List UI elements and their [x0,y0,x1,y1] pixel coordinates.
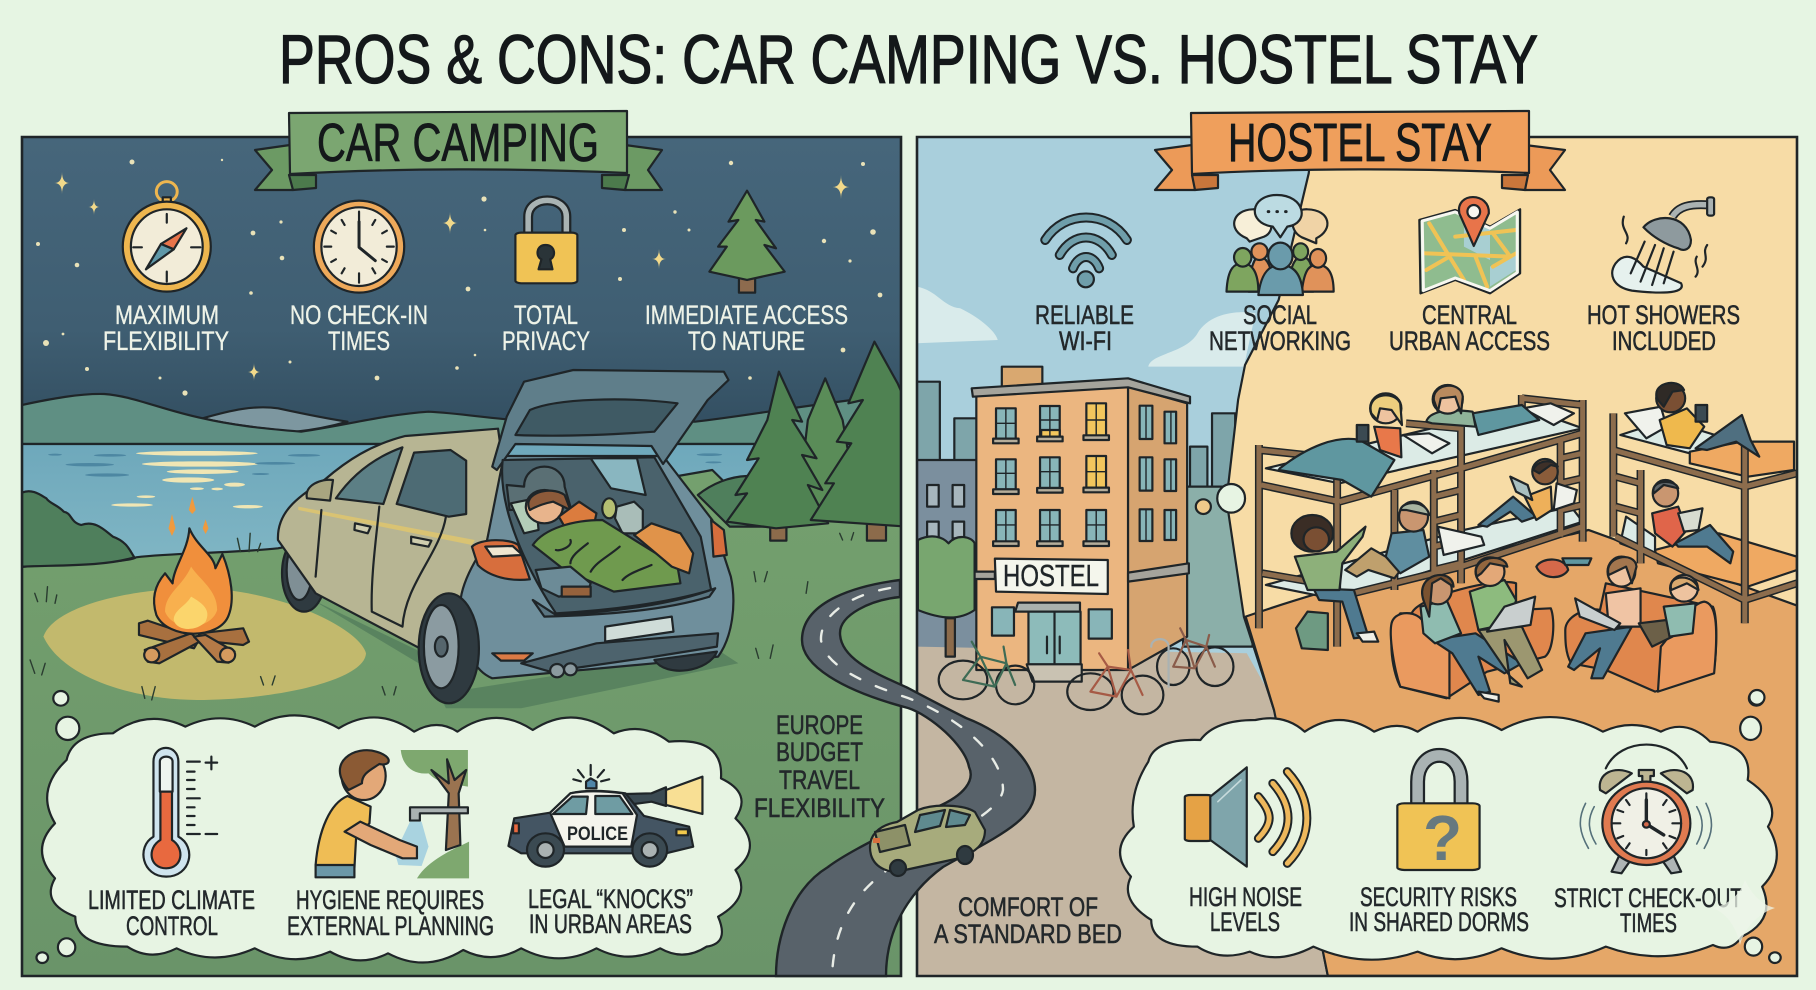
bicycles [939,628,1233,714]
pros labels: hostel stay [1035,300,1740,356]
cons cloud: hostel stay [1120,717,1777,960]
stars [36,159,882,396]
pros labels: hostel stay: SOCIAL [1243,300,1317,330]
panel: hostel stay [917,130,1816,980]
cons labels: car camping: CONTROL [126,911,218,941]
label: europe budget travel flexibility: TRAVEL [779,765,860,795]
hills, lake and ground [17,393,909,980]
icon: padlock with question mark [1397,755,1480,870]
sparkle watermark [1712,880,1775,945]
car with open hatch [278,370,733,703]
cons labels: car camping: LIMITED CLIMATE [88,885,255,915]
pros labels: hostel stay: HOT SHOWERS [1587,300,1740,330]
icon: speaker [1185,767,1307,867]
night sky scene [17,137,909,980]
cons labels: hostel stay: TIMES [1620,908,1677,938]
top bunk guest with blanket [1523,403,1574,425]
banner title: CAR CAMPING [317,113,599,173]
icon: police car with flashlight [508,765,702,867]
icon: clock [314,201,404,293]
banner title: HOSTEL STAY [1228,113,1492,173]
panel border [22,137,901,976]
banner: hostel stay [1155,111,1565,190]
winding road [776,580,1035,976]
label: europe budget travel flexibility [754,710,885,823]
cons labels: hostel stay: HIGH NOISE [1189,882,1302,912]
pros labels: car camping: FLEXIBILITY [103,326,229,356]
icon: hot shower [1612,197,1714,293]
top right guest [1625,407,1667,438]
sofas [1391,582,1553,698]
cons labels: hostel stay [1189,882,1742,938]
panel border [917,137,1797,976]
pros labels: hostel stay: INCLUDED [1612,326,1716,356]
banner: car camping [255,111,662,190]
pros labels: hostel stay: CENTRAL [1422,300,1517,330]
trees [727,342,908,541]
hostel sign text: HOSTEL [1003,558,1099,593]
pros labels: car camping: PRIVACY [502,326,590,356]
pros labels: car camping: TIMES [328,326,390,356]
icon: thermometer [143,748,217,877]
grass tufts [30,533,854,700]
cons labels: car camping: HYGIENE REQUIRES [296,885,484,915]
cons labels: hostel stay: LEVELS [1210,907,1280,937]
cons labels: car camping: IN URBAN AREAS [529,909,692,939]
backpack and floor items [1536,560,1568,577]
question mark: ? [1423,802,1462,874]
hostel scene [917,130,1816,980]
label: europe budget travel flexibility: EUROPE [776,710,863,740]
bunk beds and dorm guests [1259,383,1797,702]
thought bubble dots right [1196,484,1781,963]
pros labels: hostel stay: NETWORKING [1209,326,1351,356]
warm dorm interior [1227,130,1816,976]
cons labels: car camping: LEGAL “KNOCKS” [528,884,693,914]
pros labels: hostel stay: URBAN ACCESS [1389,326,1550,356]
pros labels: car camping: IMMEDIATE ACCESS [645,300,848,330]
sofa guests [1432,633,1522,695]
mattresses [1266,407,1797,600]
cons cloud: car camping [42,715,750,963]
glow around campfire [43,588,366,700]
campfire [139,497,249,663]
cons labels: hostel stay: IN SHARED DORMS [1349,907,1529,937]
cons labels: car camping [88,884,693,941]
hostel building [918,367,1190,682]
clouds [917,287,1255,367]
label: europe budget travel flexibility: BUDGET [776,737,863,767]
lower bunk reader [1554,483,1577,510]
thought bubble dots left [36,691,79,963]
icon: padlock [515,200,577,283]
icon: compass [123,182,211,292]
label: europe budget travel flexibility: FLEXIBILITY [754,793,885,823]
panel: car camping [17,137,909,980]
label: comfort of a standard bed [934,892,1122,949]
icon: social networking [1227,195,1334,295]
pros labels: hostel stay: WI-FI [1059,326,1112,356]
pros labels: car camping: TOTAL [514,300,578,330]
cons labels: hostel stay: SECURITY RISKS [1360,882,1517,912]
bunk frames [1259,395,1797,647]
pros labels: car camping: TO NATURE [688,326,805,356]
icon: pine tree [709,191,785,293]
pros labels: car camping: NO CHECK-IN [290,300,428,330]
pros labels: car camping [103,300,848,356]
icon: city map with pin [1419,197,1520,293]
cons labels: car camping: EXTERNAL PLANNING [287,911,494,941]
icon: wifi [1045,217,1127,287]
icon: alarm clock [1580,745,1711,873]
lower left guests [1438,527,1484,555]
icon: person washing hands [316,750,469,878]
small car on road [870,806,985,876]
label: comfort of a standard bed: A STANDARD BED [934,919,1122,949]
street [917,647,1334,980]
label: comfort of a standard bed: COMFORT OF [958,892,1098,922]
pros labels: hostel stay: RELIABLE [1035,300,1134,330]
cons labels: hostel stay: STRICT CHECK-OUT [1554,883,1742,913]
pros labels: car camping: MAXIMUM [115,300,219,330]
city buildings [917,382,1253,650]
right lower reader [1675,525,1733,563]
police text: POLICE [567,824,628,845]
